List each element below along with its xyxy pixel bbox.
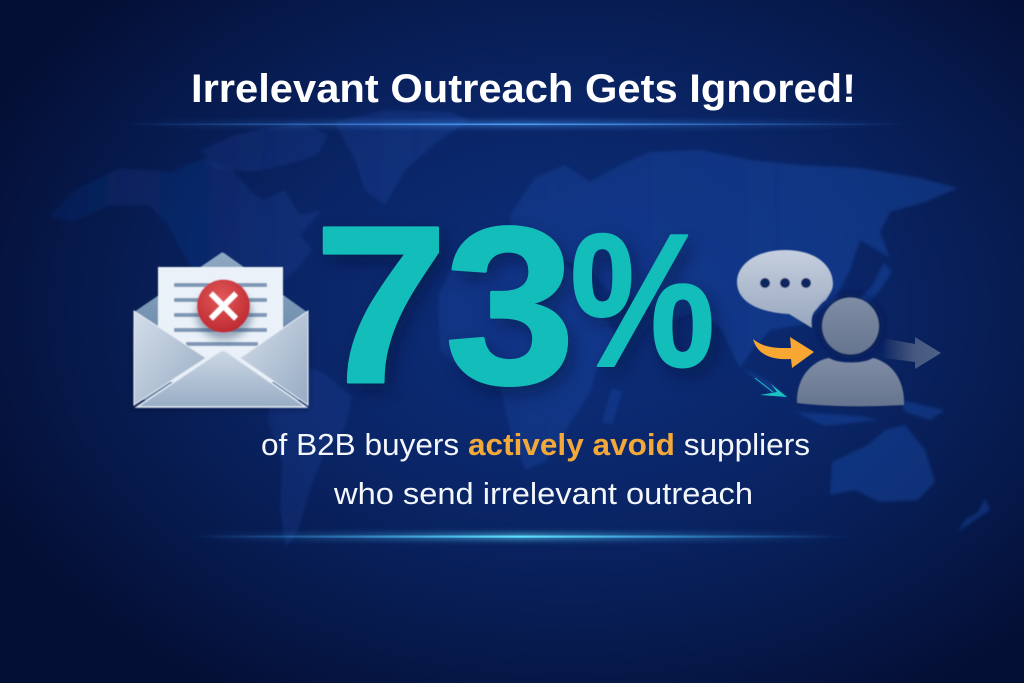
map: southeast asia islands — [742, 368, 945, 426]
icon: fading gray arrow — [882, 337, 941, 369]
map: greenland — [335, 110, 470, 205]
big statistic: 73%: 7 — [320, 188, 454, 438]
envelope back flap — [134, 252, 307, 400]
left flap — [134, 311, 206, 405]
big statistic: 73%: 3 — [445, 181, 575, 431]
map: japan — [858, 262, 892, 306]
subtitle line 2: who send irrelevant outreach — [333, 476, 753, 511]
front flap — [137, 350, 306, 407]
map: africa — [438, 250, 615, 470]
icon: envelope with rejected letter — [134, 252, 308, 408]
letter sheet — [158, 267, 283, 382]
map: eurasia — [510, 150, 958, 368]
right flap — [240, 311, 308, 405]
map: north america — [50, 158, 322, 362]
map: arctic islands — [200, 122, 328, 172]
map: new zealand — [958, 498, 990, 532]
world map — [50, 110, 990, 548]
icon: small teal arrow — [755, 378, 787, 397]
subtitle line 1: of B2B buyers actively avoid suppliers — [261, 427, 810, 462]
icon: speech bubble with ellipsis — [737, 250, 833, 328]
icon: person silhouette — [797, 293, 904, 406]
subtitle — [261, 427, 810, 511]
map: madagascar — [602, 388, 622, 425]
icon: red x badge — [196, 280, 252, 340]
title: Irrelevant Outreach Gets Ignored! — [191, 67, 856, 111]
map: south america — [268, 362, 352, 548]
big statistic: 73%: 3 — [451, 189, 581, 439]
map: australia — [830, 425, 935, 502]
big statistic: 73% — [314, 180, 721, 439]
big statistic: 73%: 7 — [314, 180, 448, 430]
bottom divider line — [190, 533, 850, 540]
top divider line — [120, 121, 910, 127]
envelope shadow — [134, 330, 308, 408]
big statistic: 73%: % — [570, 195, 715, 407]
big statistic: 73%: % — [576, 203, 721, 415]
icon: orange curved arrow — [753, 337, 814, 368]
